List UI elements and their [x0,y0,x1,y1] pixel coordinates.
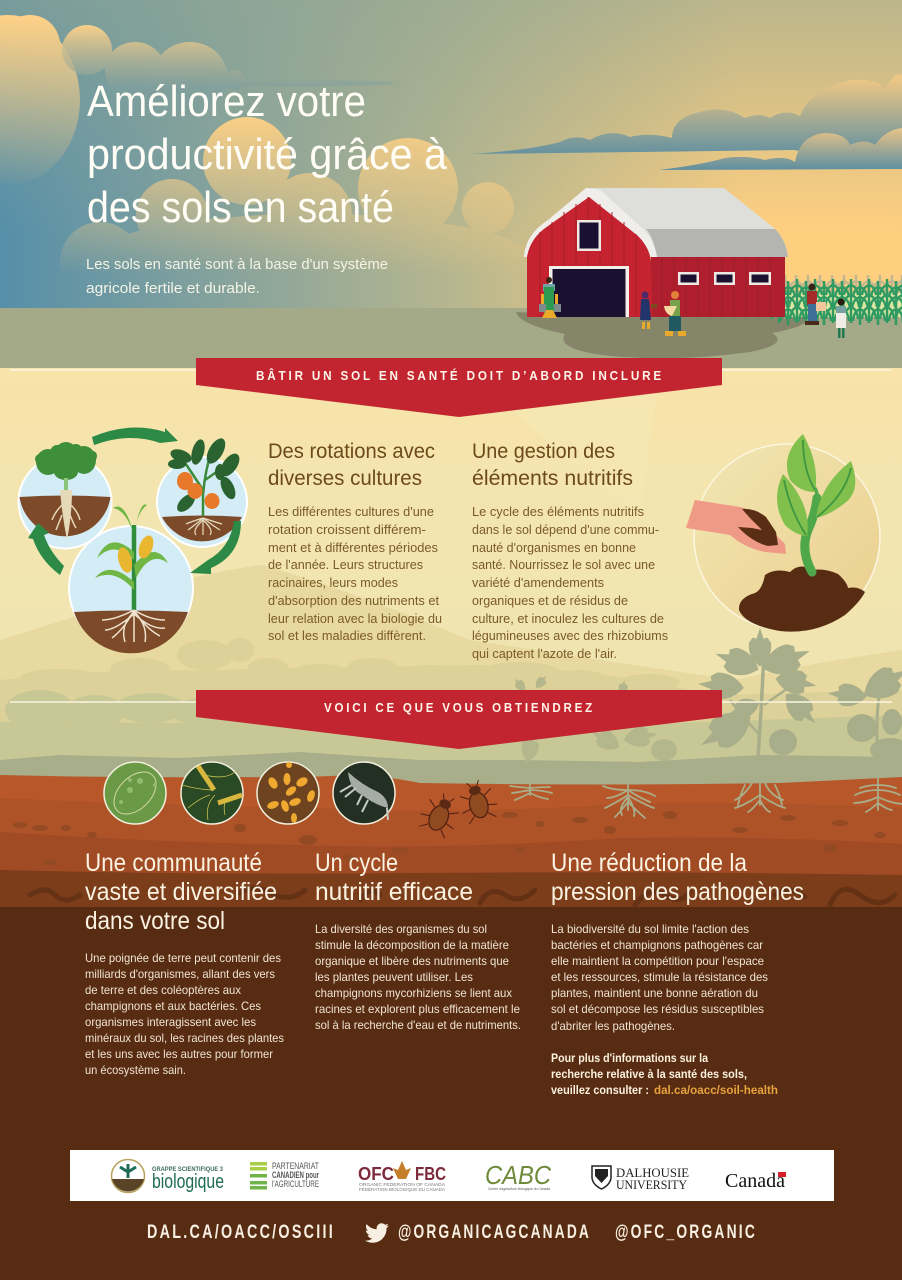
clouds right [472,74,902,170]
icon: twitter bird [365,1223,389,1243]
panel: pathogen pressure: plantes, maintient une bonne aération du [551,986,758,1000]
leaves [777,434,855,536]
panel: crop rotations: de l'année. Leurs structures [268,557,423,572]
title: productivité grâce à [87,130,447,179]
logo: partenariat canadien: PARTENARIAT [272,1161,319,1171]
panel: nutrient management: légumineuses avec des rhizobiums [472,628,668,643]
barn white gable trim [524,188,657,257]
footer links: DAL.CA/OACC/OSCIII [147,1222,335,1243]
plant silhouettes [511,628,902,764]
stem [805,498,817,572]
panel: pathogen pressure: elle maintient la compétition pour l'espace [551,954,764,968]
title: Améliorez votre [87,77,366,126]
crop rotation illustration [18,428,247,653]
seedling and hand illustration [686,434,880,632]
panel: nutrient cycle: Un cycle [315,849,398,877]
icon: bacteria circle [257,762,319,824]
panel: pathogen pressure: et les ressources, stimule la résistance des [551,970,768,984]
panel: soil community: un écosystème sain. [85,1063,186,1077]
ground strip [0,308,902,370]
barn scene [516,188,902,358]
more information note [551,1051,778,1097]
panel: nutrient management: Le cycle des éléments nutritifs [472,504,644,519]
panel: nutrient management: Une gestion des [472,439,615,463]
distant tree silhouettes [0,638,902,790]
title: des sols en santé [87,183,394,232]
farmer with crate [805,284,826,325]
panel: pathogen pressure: La biodiversité du sol limite l'action des [551,922,749,936]
panel: soil community: champignons et aux bactéries. Ces [85,999,261,1013]
logo: cabc: CABC [485,1160,551,1190]
panel: crop rotations: d'absorption des nutriments et [268,593,439,608]
footer links [147,1222,757,1243]
logo: partenariat canadien [250,1161,319,1190]
soil layers [0,775,902,1280]
title [87,77,447,232]
barn small windows [678,272,771,285]
panel: crop rotations: diverses cultures [268,466,422,490]
panel: soil community: organismes interagissent avec les [85,1015,256,1029]
panel: nutrient cycle: stimule la décomposition de la matière [315,938,509,952]
intro text [86,256,388,297]
background: hills section [0,368,902,760]
panel: nutrient cycle: nutritif efficace [315,878,473,906]
logo: partenariat canadien: l'AGRICULTURE [272,1179,319,1189]
panel: pathogen pressure: pression des pathogènes [551,878,804,906]
panel: nutrient management: éléments nutritifs [472,466,633,490]
logo: partenariat canadien: CANADIEN pour [272,1170,319,1180]
arrow: rotation top [92,428,178,445]
panel: nutrient cycle [315,849,521,1032]
barn loft window [577,220,601,251]
panel: crop rotations: Les différentes cultures d'une [268,504,434,519]
corn circle [69,504,193,653]
panel: nutrient management: qui captent l'azote de l'air. [472,646,617,661]
clouds behind title [0,15,524,266]
logo: dalhousie [592,1166,689,1192]
panel: soil community: milliards d'organismes, allant des vers [85,967,275,981]
panel: nutrient cycle: racines et explorent plus efficacement le [315,1002,520,1016]
corn field [771,275,902,325]
panel: crop rotations: racinaires, leurs modes [268,575,398,590]
logo: ofc fbc: FBC [415,1164,446,1184]
pepper circle [157,435,247,547]
more information note: Pour plus d'informations sur la [551,1051,708,1065]
panel: nutrient management: variété d'amendements [472,575,604,590]
footer links: @OFC_ORGANIC [615,1222,757,1243]
child in dress [836,298,846,338]
icon: protozoan circle [104,762,166,824]
banner: results [10,690,892,749]
panel: nutrient management: dans le sol dépend d'une commu- [472,522,659,537]
logo: dalhousie: UNIVERSITY [616,1178,687,1192]
small plant silhouette [511,673,550,764]
panel: pathogen pressure: d'abriter les pathogènes. [551,1019,675,1033]
panel: nutrient cycle: les plantes peuvent utiliser. Les [315,970,473,984]
logo: ofc fbc: FÉDÉRATION BIOLOGIQUE DU CANADA [359,1186,445,1192]
logo: ofc fbc: ORGANIC FEDERATION OF CANADA [359,1182,445,1187]
panel: soil community [85,849,284,1077]
panel: soil community: et les uns avec les autres pour former [85,1047,273,1061]
arrow: rotation right [190,521,241,574]
footer links: @ORGANICAGCANADA [398,1222,591,1243]
logo: ofc fbc: OFC [358,1164,394,1184]
panel: soil community: minéraux du sol, les racines des plantes [85,1031,284,1045]
worm silhouettes [30,888,895,905]
logo: dalhousie: DALHOUSIE [616,1166,689,1180]
logo: grappe biologique [112,1160,224,1193]
panel: nutrient management: culture, et inoculez les cultures de [472,611,664,626]
panel: soil community: Une communauté [85,849,262,877]
logo: grappe biologique: GRAPPE SCIENTIFIQUE 3 [152,1166,223,1173]
root silhouettes [510,778,902,818]
panel: nutrient cycle: organique et libère des nutriments que [315,954,509,968]
logo: ofc fbc [358,1161,446,1192]
barn side wall [651,257,785,317]
more information note: recherche relative à la santé des sols, [551,1067,747,1081]
logo: grappe biologique: biologique [152,1171,224,1193]
more information note: dal.ca/oacc/soil-health [654,1083,778,1097]
panel: nutrient management [472,439,668,661]
barn roof [586,188,788,257]
soil mound [739,566,865,632]
medium plant silhouette [587,679,677,761]
barn front wall [527,197,652,317]
panel: pathogen pressure: Une réduction de la [551,849,747,877]
banner: soil health: BÂTIR UN SOL EN SANTÉ DOIT D’ABORD INCLURE [256,368,664,383]
icon: beetles [416,777,500,840]
panel: nutrient management: nauté d'organismes en bonne [472,540,636,555]
panel: crop rotations: ment et à différentes périodes [268,540,438,555]
intro text: agricole fertile et durable. [86,280,260,297]
panel: nutrient cycle: champignons mycorhiziens se lient aux [315,986,512,1000]
panel: soil community: dans votre sol [85,907,225,935]
panel: crop rotations: rotation croissent différem- [268,522,426,537]
panel: pathogen pressure: sol et décompose les résidus susceptibles [551,1002,764,1016]
banner: results: VOICI CE QUE VOUS OBTIENDREZ [324,701,595,715]
parsnip circle [18,442,112,548]
girl with tray [640,292,657,329]
logo: cabc: Centre d'agriculture biologique du Canada [488,1186,551,1191]
panel: nutrient cycle: sol à la recherche d'eau et de nutriments. [315,1018,521,1032]
panel: crop rotations: sol et les maladies diffèrent. [268,628,426,643]
background: sky [0,0,902,310]
intro text: Les sols en santé sont à la base d'un système [86,256,388,273]
panel: soil community: vaste et diversifiée [85,878,277,906]
banner: soil health [10,358,892,417]
more information note: veuillez consulter : [551,1083,649,1097]
panel: nutrient cycle: La diversité des organismes du sol [315,922,487,936]
panel: pathogen pressure: bactéries et champignons pathogènes car [551,938,763,952]
logo strip [70,1150,834,1201]
panel: crop rotations [268,439,442,643]
barn door [549,266,629,317]
icon: springtail circle [333,762,395,824]
panel: nutrient management: organiques et de résidus de [472,593,628,608]
arrow: rotation left [28,523,64,575]
hand [686,500,786,554]
farmer with buckets [539,277,561,318]
panel: crop rotations: Des rotations avec [268,439,435,463]
panel: nutrient management: santé. Nourrissez le sol avec une [472,557,655,572]
farmer with basket [664,291,686,336]
right plant silhouette [827,657,902,762]
logo: canada: Canada [725,1170,785,1192]
panel: soil community: Une poignée de terre peut contenir des [85,951,281,965]
large plant silhouette [693,628,824,759]
icon: mycorrhizal circle [181,762,243,824]
panel: pathogen pressure [551,849,804,1033]
panel: soil community: de terre et des coléoptères aux [85,983,241,997]
barn yard shadow [516,312,807,358]
panel: crop rotations: leur relation avec la biologie du [268,611,442,626]
